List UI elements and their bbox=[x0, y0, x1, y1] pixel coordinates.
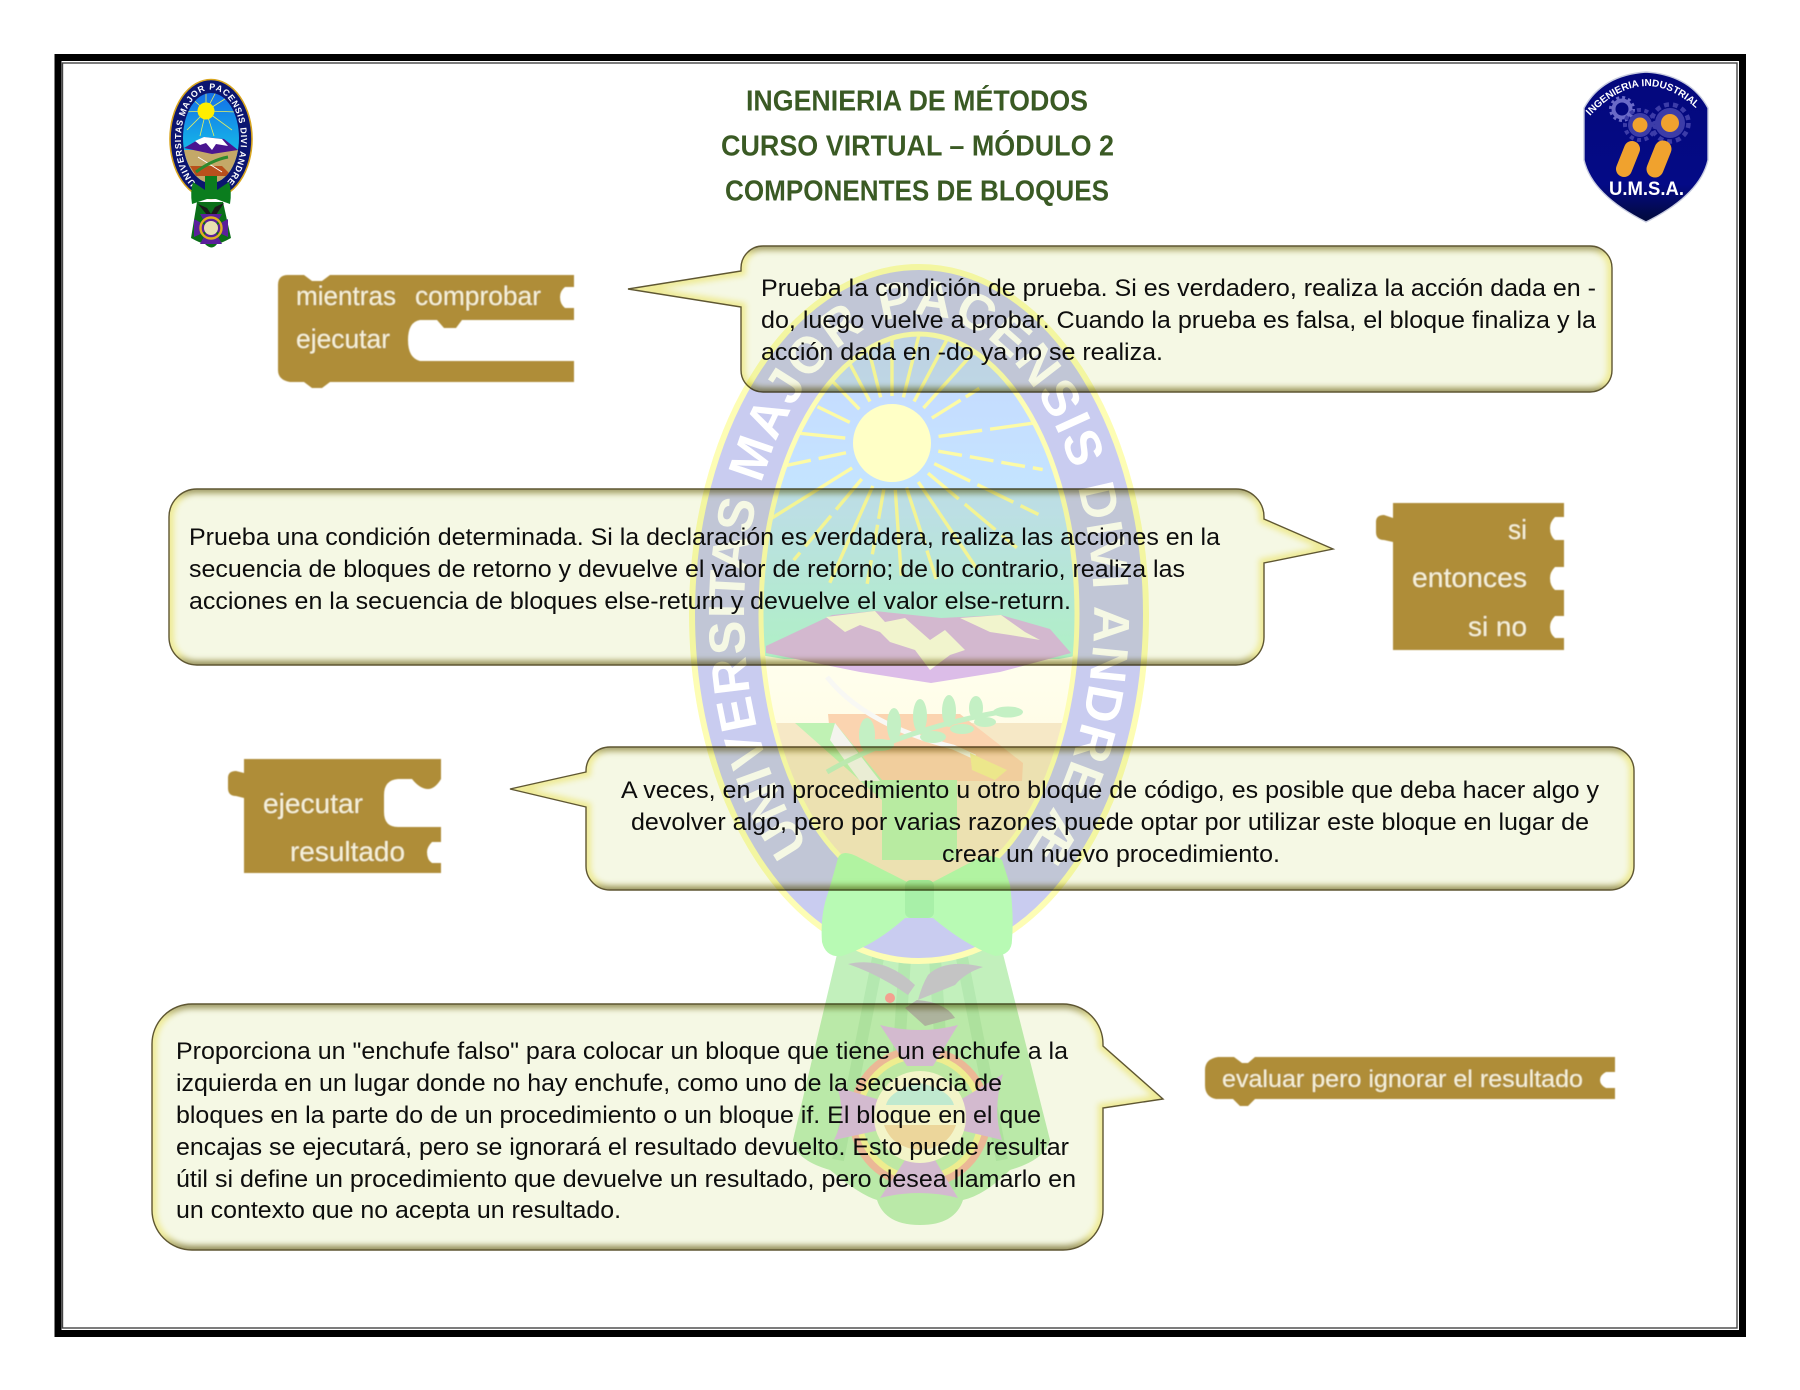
callout text: mientras bbox=[761, 275, 1597, 366]
watermark: university seal: UNIVERSITAS MAJOR PACENSIS DIVI ANDRE Æ bbox=[708, 280, 1130, 866]
callout text: evaluar: izquierda en un lugar donde no hay enchufe, como uno de la secuencia de bbox=[176, 1070, 1002, 1097]
watermark: university seal bbox=[689, 264, 1149, 1225]
block: si entonces si no: si bbox=[1508, 514, 1527, 545]
callout text: evaluar: Proporciona un "enchufe falso" para colocar un bloque que tiene un enchufe a la bbox=[176, 1038, 1069, 1065]
block: ejecutar resultado: ejecutar bbox=[263, 788, 363, 819]
block: mientras comprobar ejecutar bbox=[278, 275, 574, 388]
logo: ingenieria industrial shield bbox=[1583, 71, 1709, 223]
block: ejecutar resultado bbox=[228, 759, 441, 873]
block: si entonces si no: si no bbox=[1468, 611, 1527, 642]
block: ejecutar resultado: resultado bbox=[290, 836, 405, 867]
logo: ingenieria industrial shield: U.M.S.A. bbox=[1609, 179, 1684, 200]
callout text: ejecutar resultado: A veces, en un procedimiento u otro bloque de código, es posible que deba hacer algo y bbox=[621, 777, 1599, 804]
callout text: si entonces: acciones en la secuencia de bloques else-return y devuelve el valor else-return. bbox=[189, 588, 1071, 615]
callout shape: ejecutar resultado bbox=[510, 747, 1634, 890]
title: COMPONENTES DE BLOQUES bbox=[725, 176, 1109, 208]
callout text: mientras: Prueba la condición de prueba. Si es verdadero, realiza la acción dada en - bbox=[761, 275, 1596, 302]
callout text: si entonces: secuencia de bloques de retorno y devuelve el valor de retorno; de lo contrario, realiza las bbox=[189, 556, 1185, 583]
title bbox=[721, 84, 1114, 208]
callout text: evaluar bbox=[176, 1038, 1076, 1224]
callout text: mientras: acción dada en -do ya no se realiza. bbox=[761, 339, 1163, 366]
block: evaluar pero ignorar el resultado: evaluar pero ignorar el resultado bbox=[1222, 1066, 1583, 1093]
logo: university seal bbox=[169, 78, 253, 248]
block: si entonces si no bbox=[1376, 503, 1564, 650]
callout text: ejecutar resultado bbox=[621, 777, 1599, 868]
callout text: evaluar: un contexto que no acepta un resultado. bbox=[176, 1197, 621, 1224]
callout text: ejecutar resultado: crear un nuevo procedimiento. bbox=[942, 841, 1280, 868]
callout text: evaluar: encajas se ejecutará, pero se ignorará el resultado devuelto. Esto puede resultar bbox=[176, 1134, 1069, 1161]
block: evaluar pero ignorar el resultado bbox=[1205, 1057, 1615, 1106]
callout text: evaluar: útil si define un procedimiento que devuelve un resultado, pero desea llamarlo en bbox=[176, 1166, 1076, 1193]
title: INGENIERIA DE MÉTODOS bbox=[746, 84, 1088, 118]
block: mientras comprobar ejecutar: mientras bbox=[296, 281, 396, 311]
callout text: ejecutar resultado: devolver algo, pero por varias razones puede optar por utilizar este bloque en lugar de bbox=[631, 809, 1589, 836]
callout shape: evaluar bbox=[152, 1004, 1163, 1250]
title: CURSO VIRTUAL – MÓDULO 2 bbox=[721, 128, 1114, 162]
block: mientras comprobar ejecutar: comprobar bbox=[415, 281, 541, 311]
callout text: si entonces bbox=[189, 524, 1221, 615]
callout text: evaluar: bloques en la parte do de un procedimiento o un bloque if. El bloque en el que bbox=[176, 1102, 1041, 1129]
callout shape: mientras bbox=[628, 246, 1612, 392]
callout text: mientras: do, luego vuelve a probar. Cuando la prueba es falsa, el bloque finaliza y la bbox=[761, 307, 1597, 334]
logo: ingenieria industrial shield: INGENIERIA INDUSTRIAL bbox=[1586, 79, 1698, 116]
block: si entonces si no: entonces bbox=[1412, 562, 1527, 593]
callout shape: si entonces bbox=[169, 489, 1333, 665]
block: mientras comprobar ejecutar: ejecutar bbox=[296, 324, 390, 354]
callout text: si entonces: Prueba una condición determinada. Si la declaración es verdadera, realiza las acciones en la bbox=[189, 524, 1221, 551]
